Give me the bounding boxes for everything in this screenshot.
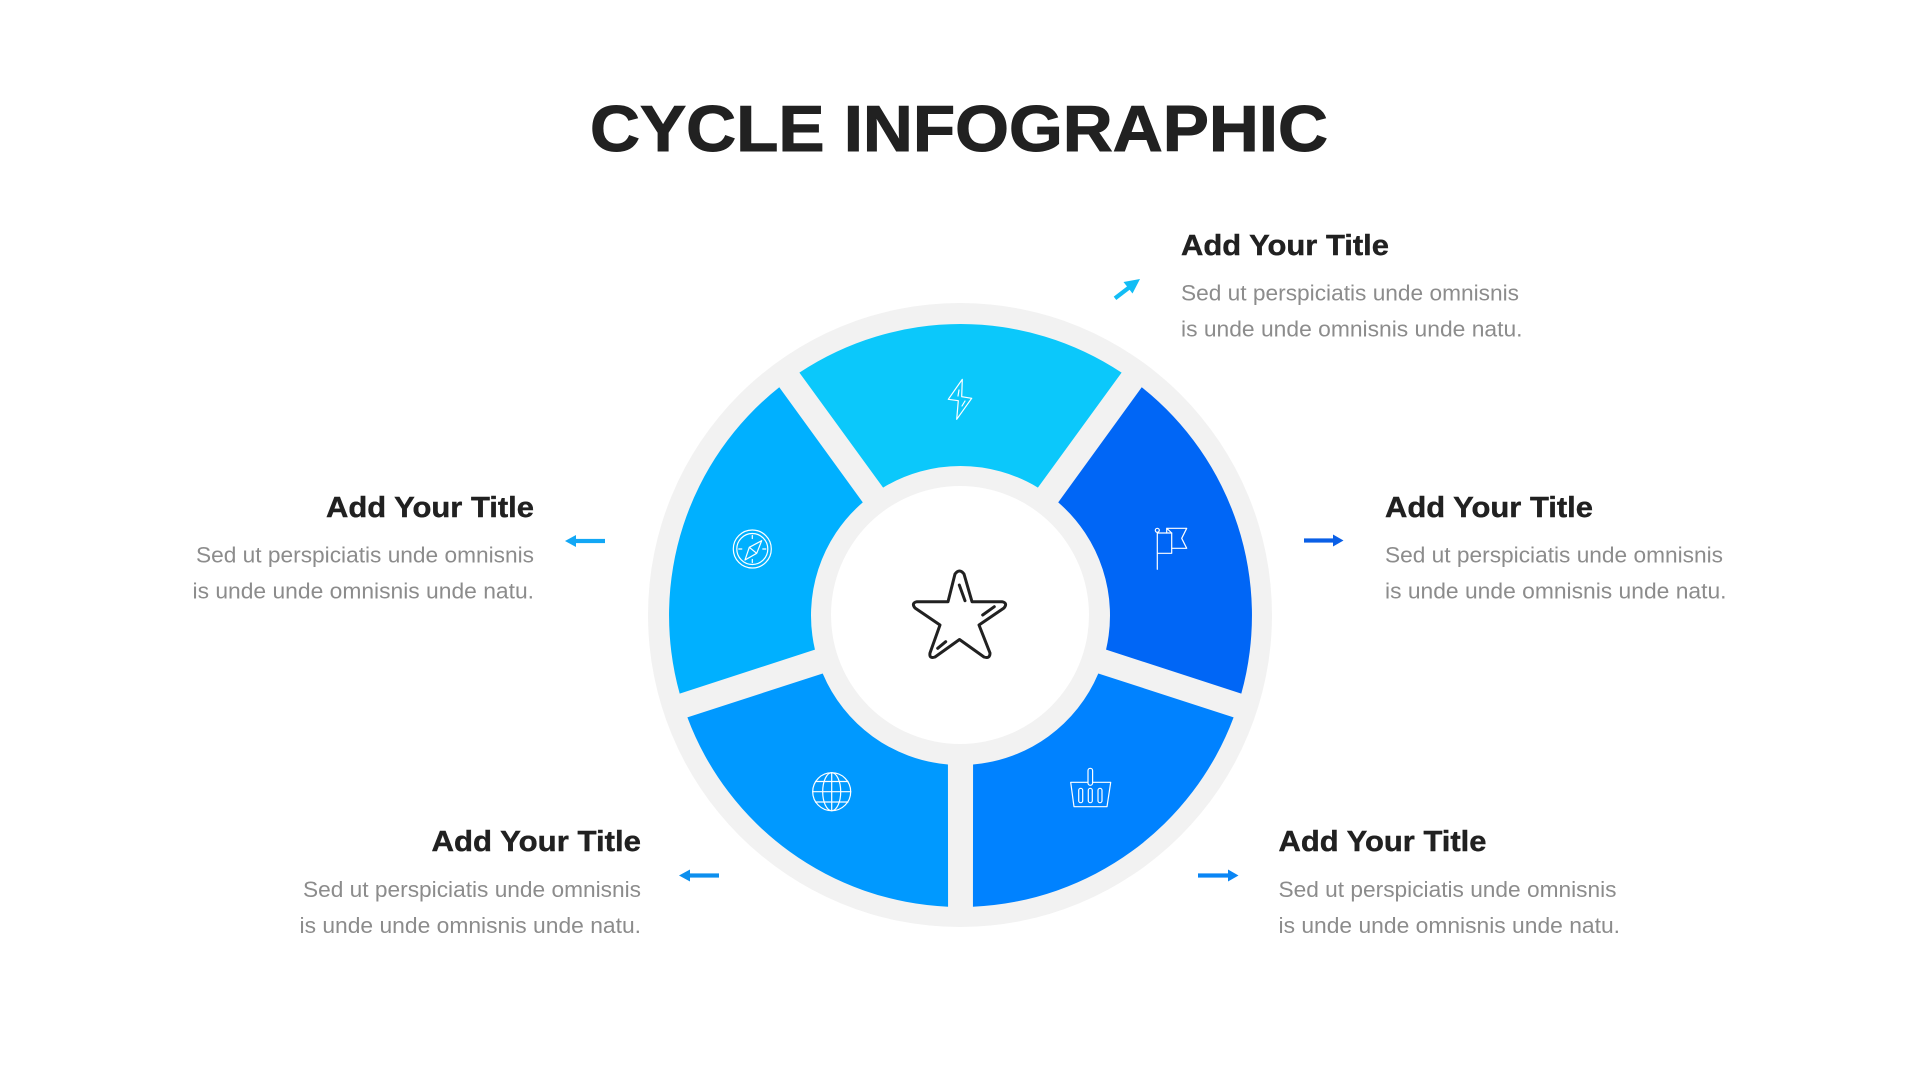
body text: Sed ut perspiciatis unde omnisnis [196, 542, 534, 568]
heading: Add Your Title [432, 826, 641, 858]
segment: top [799, 324, 1122, 488]
body text: is unde unde omnisnis unde natu. [192, 578, 534, 604]
text block: top [1181, 230, 1522, 342]
heading: Add Your Title [1181, 230, 1389, 262]
arrow: right [1304, 534, 1344, 546]
heading: Add Your Title [326, 492, 534, 524]
centre white circle [831, 486, 1089, 744]
arrow: top [1115, 279, 1140, 298]
body text: is unde unde omnisnis unde natu. [1385, 578, 1726, 604]
icon: compass [733, 530, 771, 568]
outer grey ring [648, 303, 1272, 927]
arrow: left [565, 535, 605, 547]
body text [1181, 280, 1522, 342]
title: CYCLE INFOGRAPHIC [590, 92, 1328, 165]
icon: star [913, 571, 1006, 658]
body text: is unde unde omnisnis unde natu. [1181, 316, 1522, 342]
body text [300, 877, 641, 938]
heading: Add Your Title [1278, 826, 1486, 858]
segment: left [634, 372, 889, 729]
segment: lower left [659, 624, 1016, 946]
body text [192, 542, 534, 604]
icon: flag [1155, 528, 1187, 569]
text block: lower left [300, 826, 641, 938]
text block: lower right [1278, 826, 1620, 938]
segment: right [1032, 372, 1287, 729]
heading: Add Your Title [1385, 492, 1593, 524]
body text: Sed ut perspiciatis unde omnisnis [1181, 280, 1519, 306]
segment: lower right [905, 624, 1262, 946]
icon: basket [1071, 768, 1111, 807]
icon: globe [813, 773, 851, 811]
text block: left [192, 492, 534, 604]
body text: is unde unde omnisnis unde natu. [300, 913, 641, 938]
icon: lightning bolt [948, 379, 972, 419]
arrow: lower left [679, 870, 719, 882]
body text: Sed ut perspiciatis unde omnisnis [1385, 542, 1723, 568]
cycle diagram [634, 303, 1287, 946]
text block: right [1385, 492, 1726, 604]
body text: Sed ut perspiciatis unde omnisnis [1278, 877, 1616, 902]
body text: is unde unde omnisnis unde natu. [1278, 913, 1620, 938]
body text [1385, 542, 1726, 604]
body text [1278, 877, 1620, 938]
body text: Sed ut perspiciatis unde omnisnis [303, 877, 641, 902]
arrow: lower right [1198, 870, 1238, 882]
